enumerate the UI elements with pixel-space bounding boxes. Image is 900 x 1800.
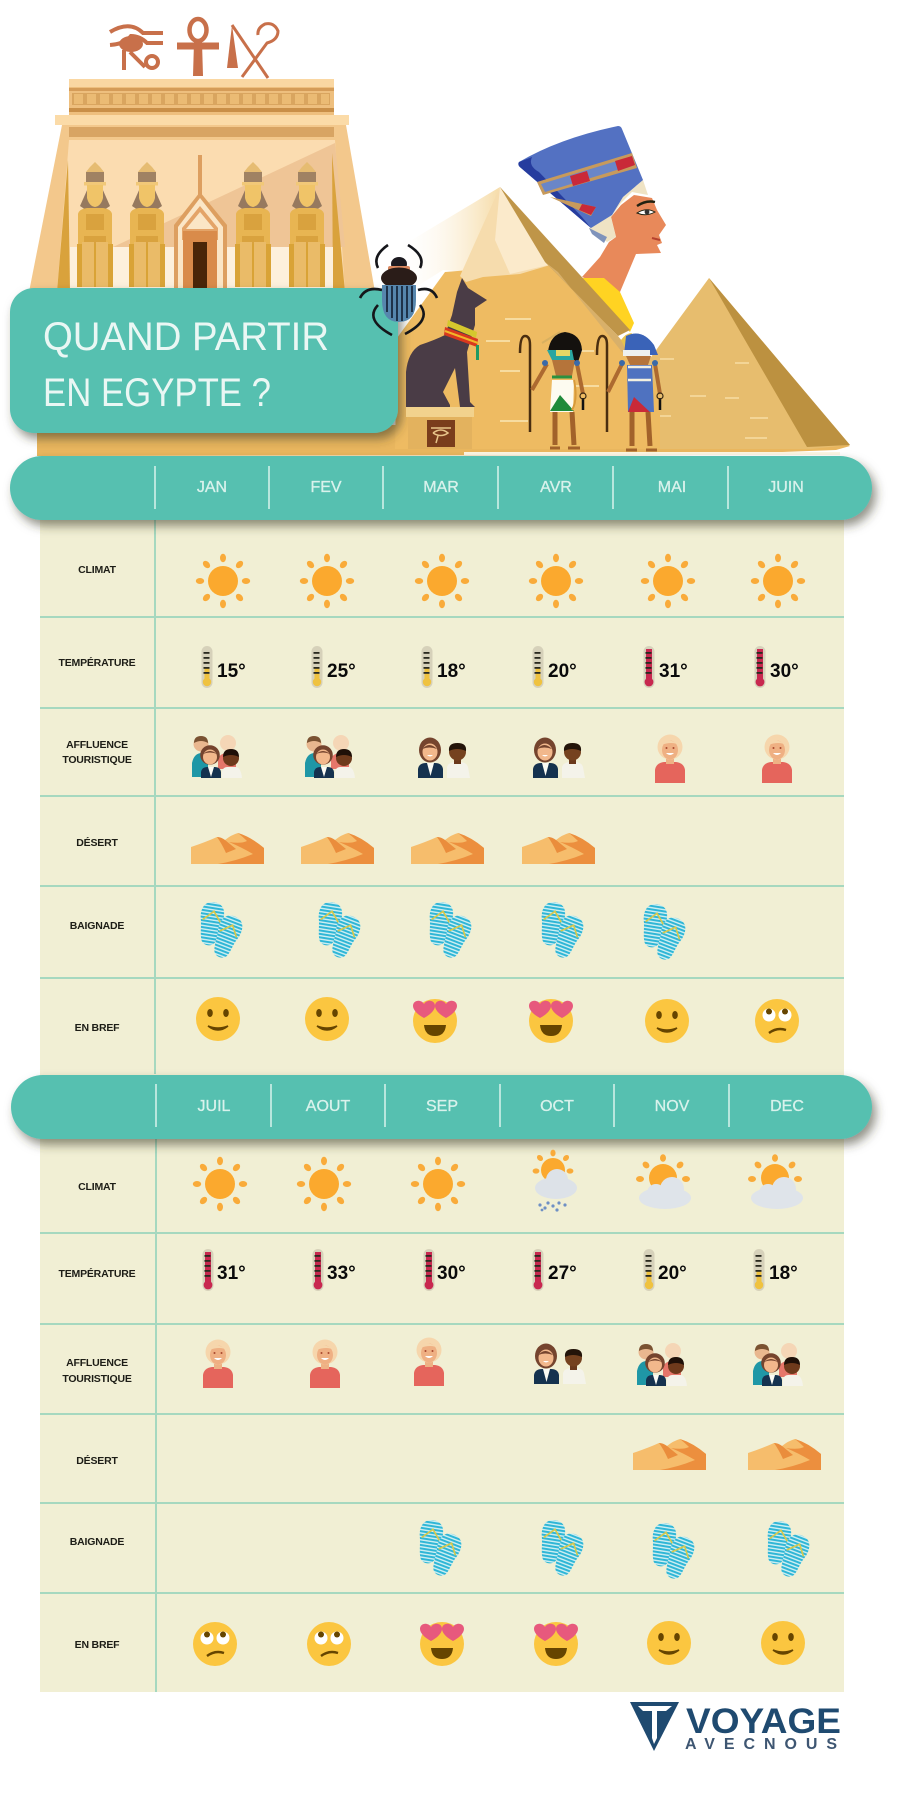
row: température: 30° <box>770 661 799 682</box>
row: température: 31° <box>217 1263 246 1284</box>
ankh <box>177 19 219 76</box>
row: affluence touristique: TOURISTIQUE <box>62 1373 132 1385</box>
row: en bref <box>75 997 799 1043</box>
month header band 1: MAR <box>423 479 459 496</box>
row: température: 25° <box>327 661 356 682</box>
hieroglyphs on temple roof <box>110 19 278 78</box>
cat pedestal with eye plaque <box>406 407 474 449</box>
title: QUAND PARTIR <box>43 315 329 359</box>
row: en bref: EN BREF <box>75 1022 120 1034</box>
month header band 2 <box>11 1075 872 1139</box>
cat statue Bastet <box>406 278 487 407</box>
row: désert: DÉSERT <box>76 1454 118 1467</box>
logo: Voyage Avec Nous <box>630 1702 841 1753</box>
row: température: TEMPÉRATURE <box>59 656 136 669</box>
panel: table July to December <box>11 1075 872 1692</box>
row: en bref: EN BREF <box>75 1639 120 1651</box>
big pyramid <box>395 187 660 449</box>
white edge under sand <box>464 452 840 455</box>
month header band 2: DEC <box>770 1098 804 1115</box>
figure: pharaoh with staff <box>597 333 663 450</box>
row: affluence touristique: TOURISTIQUE <box>62 754 132 766</box>
illustration: foreground figures <box>360 245 663 450</box>
row: climat: CLIMAT <box>78 564 117 576</box>
row: affluence touristique: AFFLUENCE <box>66 739 128 751</box>
row: température: 31° <box>659 661 688 682</box>
row: affluence touristique <box>62 734 792 783</box>
row: baignade: BAIGNADE <box>70 920 124 932</box>
Nefertiti bust <box>518 126 666 332</box>
month header band 1: MAI <box>658 479 686 496</box>
sand base <box>37 425 850 456</box>
row: climat: CLIMAT <box>78 1181 117 1193</box>
panel: title box <box>10 288 398 433</box>
row: température: 20° <box>548 661 577 682</box>
right pyramid <box>640 278 850 449</box>
month header band 2: NOV <box>655 1098 690 1115</box>
figure: Thoth with staff <box>520 332 586 448</box>
row: affluence touristique <box>62 1338 803 1388</box>
row: température: 18° <box>437 661 466 682</box>
month header band 1 <box>10 456 872 520</box>
scarab beetle <box>360 245 437 335</box>
row: température <box>59 646 799 688</box>
logo: Voyage Avec Nous: VOYAGE <box>686 1702 841 1741</box>
row: température: TEMPÉRATURE <box>59 1267 136 1280</box>
row: température: 33° <box>327 1263 356 1284</box>
eye of Horus <box>110 26 163 70</box>
row: température: 20° <box>658 1263 687 1284</box>
month header band 1: JUIN <box>768 479 804 496</box>
row: climat <box>78 1150 803 1212</box>
row: température <box>59 1249 798 1291</box>
row: température: 30° <box>437 1263 466 1284</box>
month header band 1: FEV <box>310 479 342 496</box>
row: climat <box>78 554 805 608</box>
illustration: temple and pyramids <box>29 19 850 456</box>
panel: table January to June <box>10 456 872 1090</box>
logo mark <box>630 1702 679 1751</box>
row: en bref <box>75 1621 805 1666</box>
row: température: 18° <box>769 1263 798 1284</box>
temple of Abu Simbel <box>29 79 375 292</box>
month header band 1: JAN <box>197 479 227 496</box>
row: affluence touristique: AFFLUENCE <box>66 1357 128 1369</box>
row: baignade <box>70 1518 813 1582</box>
logo: Voyage Avec Nous: AVECNOUS <box>685 1736 837 1753</box>
flail and crook <box>227 24 278 78</box>
title: EN EGYPTE ? <box>43 371 271 415</box>
row: température: 27° <box>548 1263 577 1284</box>
row: désert: DÉSERT <box>76 836 118 849</box>
month header band 2: OCT <box>540 1098 574 1115</box>
month header band 1: AVR <box>540 479 572 496</box>
month header band 2: SEP <box>426 1098 458 1115</box>
row: température: 15° <box>217 661 246 682</box>
month header band 2: AOUT <box>306 1098 350 1115</box>
month header band 2: JUIL <box>198 1098 231 1115</box>
row: désert <box>76 1439 821 1470</box>
row: baignade <box>70 900 689 963</box>
row: baignade: BAIGNADE <box>70 1536 124 1548</box>
row: désert <box>76 833 595 864</box>
